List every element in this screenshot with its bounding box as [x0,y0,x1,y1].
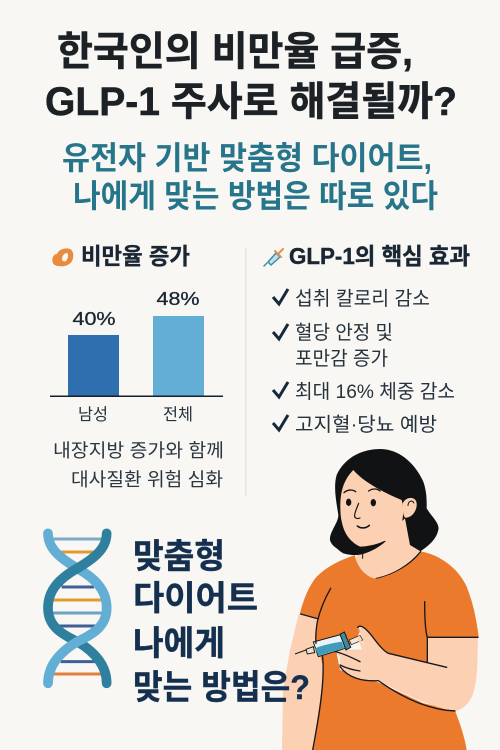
checklist item 2: 혈당 안정 및 [295,322,393,344]
subtitle: 나에게 맞는 방법은 따로 있다 [73,178,438,214]
right arm and hand [335,626,478,711]
checklist item 2: 포만감 증가 [295,348,388,370]
title: GLP-1 주사로 해결될까? [45,80,457,124]
title [45,30,457,124]
ear [403,498,417,518]
bottom question text: 맞는 방법은? [133,669,310,707]
checklist item 2 [273,322,393,370]
bottom question text [133,538,310,707]
hair under chin [332,530,386,555]
checklist item 4: 고지혈·당뇨 예방 [295,414,437,436]
caption [53,440,224,490]
face details [344,489,421,579]
thumb [358,627,370,657]
bar: male 40% [68,309,119,396]
icon: DNA helix [48,533,107,683]
axis label: total: 전체 [163,405,193,424]
left arm [282,614,325,750]
caption: 내장지방 증가와 함께 [53,440,224,461]
shirt and arm outlines [301,588,478,750]
panel: GLP-1 effects [264,243,470,436]
bar: total 48%: 48% [156,289,200,309]
face [340,470,403,547]
shirt [300,552,479,750]
checklist item 1: 섭취 칼로리 감소 [295,288,430,310]
title: 한국인의 비만율 급증, [57,30,413,74]
caption: 대사질환 위험 심화 [71,469,223,490]
bar chart [50,289,223,424]
icon: syringe [264,249,283,266]
back hair [330,449,439,555]
bottom question text: 다이어트 [133,580,258,618]
heading: GLP-1 effects: GLP-1의 핵심 효과 [289,243,470,269]
axis label: male: 남성 [78,405,108,424]
panel divider [245,248,246,496]
bar: male 40%: 40% [72,309,116,329]
bottom question text: 맞춤형 [133,538,225,576]
subtitle: 유전자 기반 맞춤형 다이어트, [62,140,432,176]
subtitle [62,140,438,214]
panel: obesity increase [50,243,224,490]
heading: obesity increase: 비만율 증가 [81,243,190,269]
syringe [295,632,363,657]
bar: total 48% [153,289,204,396]
icon: belly [52,248,73,266]
bottom question text: 나에게 [133,625,225,663]
neck [356,518,421,579]
checklist item 3: 최대 16% 체중 감소 [295,381,455,403]
illustration: woman injecting GLP-1 [282,449,479,750]
